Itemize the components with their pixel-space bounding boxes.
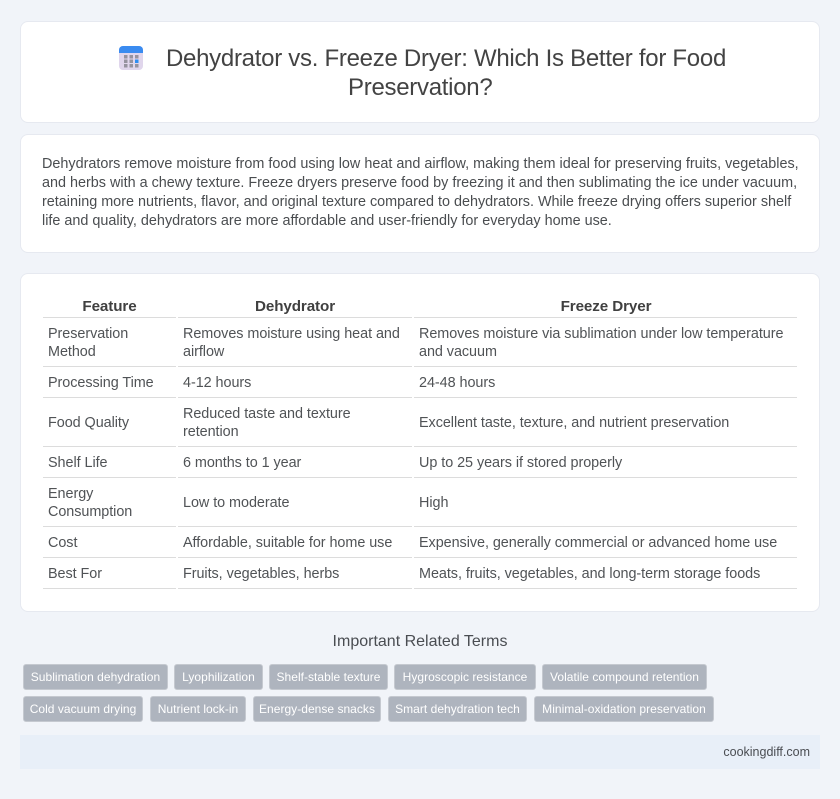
related terms tags: Smart dehydration tech	[395, 702, 520, 716]
related terms heading: Important Related Terms	[333, 633, 507, 650]
intro text panel	[20, 134, 820, 253]
row: cost: Cost	[48, 535, 77, 551]
intro paragraph: life and quality, dehydrators are more affordable and user-friendly for everyday home use.	[42, 213, 612, 229]
row: energy consumption: Energy	[48, 486, 93, 502]
intro paragraph: and herbs with a chewy texture. Freeze dryers preserve food by freezing it and then sublimating the ice under vacuum,	[42, 175, 797, 191]
comparison table panel	[20, 273, 820, 612]
footer bar	[20, 735, 820, 769]
table header: Freeze Dryer	[561, 298, 651, 315]
row: processing time: Processing Time	[48, 375, 154, 391]
row: food quality	[48, 406, 729, 440]
related terms tags: Hygroscopic resistance	[403, 670, 527, 684]
header panel	[20, 21, 820, 123]
row: preservation method: airflow	[183, 344, 224, 360]
row: shelf life	[48, 455, 622, 471]
row: best for	[48, 566, 760, 582]
row: processing time	[48, 375, 495, 391]
related terms tags: Sublimation dehydration	[31, 670, 160, 684]
row: preservation method	[48, 326, 783, 360]
related terms tags: Cold vacuum drying	[30, 702, 136, 716]
row: processing time: 24-48 hours	[419, 375, 495, 391]
row: best for: Best For	[48, 566, 102, 582]
row: preservation method: Method	[48, 344, 96, 360]
footer source text: cookingdiff.com	[723, 745, 810, 759]
related terms tags: Shelf-stable texture	[276, 670, 380, 684]
related terms tags: Volatile compound retention	[550, 670, 699, 684]
row: preservation method: and vacuum	[419, 344, 497, 360]
row: processing time: 4-12 hours	[183, 375, 251, 391]
intro paragraph: Dehydrators remove moisture from food using low heat and airflow, making them ideal for preserving fruits, vegetables,	[42, 156, 799, 172]
row: shelf life: 6 months to 1 year	[183, 455, 301, 471]
row: energy consumption: Consumption	[48, 504, 132, 520]
row: best for: Meats, fruits, vegetables, and long-term storage foods	[419, 566, 760, 582]
row: cost	[48, 535, 777, 551]
row: preservation method: Removes moisture using heat and	[183, 326, 400, 342]
row: energy consumption: Low to moderate	[183, 495, 289, 511]
intro paragraph: retaining more nutrients, flavor, and original texture compared to dehydrators. While freeze drying offers superior shelf	[42, 194, 791, 210]
row: energy consumption: High	[419, 495, 448, 511]
icon: calendar	[119, 46, 143, 70]
table header: Feature	[82, 298, 137, 315]
row: food quality: Reduced taste and texture	[183, 406, 351, 422]
title: Preservation?	[348, 74, 492, 101]
row: preservation method: Preservation	[48, 326, 128, 342]
row: shelf life: Shelf Life	[48, 455, 108, 471]
row: energy consumption	[48, 486, 448, 520]
related terms tags: Energy-dense snacks	[259, 702, 375, 716]
related terms tags: Minimal-oxidation preservation	[542, 702, 706, 716]
row: food quality: Food Quality	[48, 415, 129, 431]
related terms tags: Lyophilization	[182, 670, 255, 684]
comparison table	[43, 298, 797, 589]
row: food quality: retention	[183, 424, 239, 440]
related terms tags: Nutrient lock-in	[158, 702, 238, 716]
row: food quality: Excellent taste, texture, and nutrient preservation	[419, 415, 729, 431]
row: cost: Expensive, generally commercial or advanced home use	[419, 535, 777, 551]
row: preservation method: Removes moisture via sublimation under low temperature	[419, 326, 783, 342]
related terms tags	[23, 664, 714, 722]
table header: Dehydrator	[255, 298, 335, 315]
title: Dehydrator vs. Freeze Dryer: Which Is Better for Food	[166, 45, 726, 72]
intro paragraph	[42, 156, 799, 229]
table header	[82, 298, 652, 315]
title	[166, 45, 726, 101]
row: best for: Fruits, vegetables, herbs	[183, 566, 339, 582]
row: shelf life: Up to 25 years if stored properly	[419, 455, 622, 471]
row: cost: Affordable, suitable for home use	[183, 535, 392, 551]
